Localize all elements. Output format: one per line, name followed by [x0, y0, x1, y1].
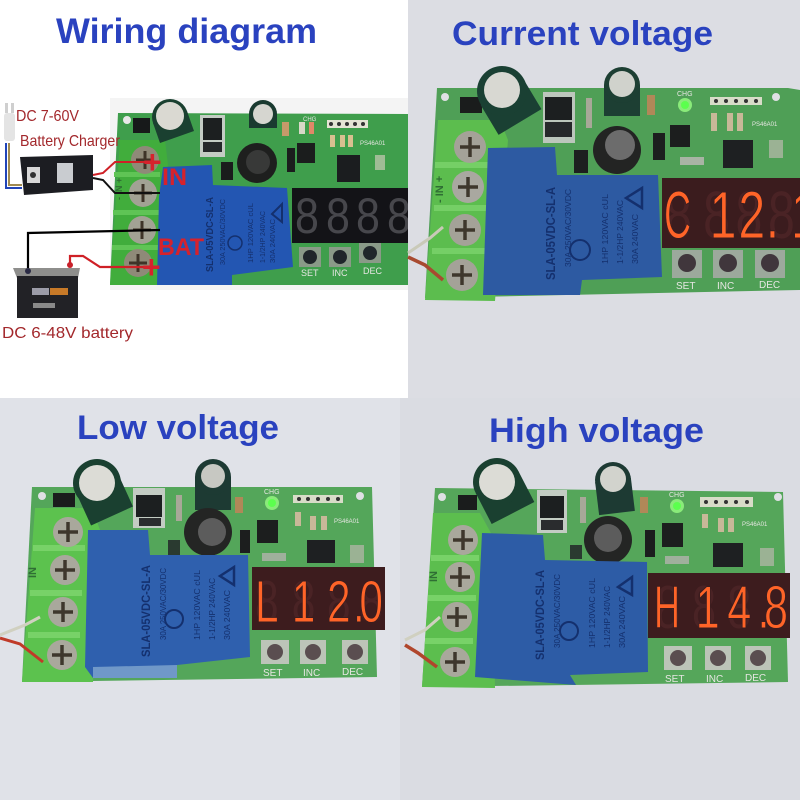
buttons: SET [301, 268, 319, 278]
LED display: C [664, 178, 691, 253]
icon: battery charger [20, 155, 93, 195]
relay: SLA-05VDC-SL-A [543, 186, 558, 280]
relay: 1HP 120VAC cUL [588, 577, 597, 648]
module board: CHG [303, 117, 317, 123]
buttons: SET [263, 668, 282, 679]
wires: charger to IN [93, 162, 160, 193]
indicator: CHG LED: CHG [677, 91, 693, 98]
label: IN: IN [162, 164, 187, 191]
wires: mains to charger [6, 143, 22, 188]
buttons: SET [665, 674, 684, 685]
relay: 30A 240VAC [223, 590, 232, 640]
LED display: 14.8 [696, 575, 788, 642]
relay [483, 147, 662, 295]
module board: PS46A01 [752, 122, 778, 128]
buttons [299, 243, 383, 278]
buttons: DEC [363, 266, 383, 276]
relay: 30A 250VAC/30VDC [564, 189, 573, 267]
relay: 30A 250VAC/30VDC [553, 574, 562, 648]
module board: - IN + [434, 176, 446, 203]
relay: SLA-05VDC-SL-A [533, 570, 547, 660]
label: battery charger: Battery Charger [20, 133, 121, 150]
buttons: INC [706, 674, 723, 685]
wires: battery to BAT [28, 230, 160, 270]
indicator: CHG LED [669, 492, 685, 513]
module board: IN [428, 571, 440, 582]
panel: high voltage [400, 398, 800, 800]
relay: SLA-05VDC-SL-A [139, 565, 153, 657]
relay: 30A 250VAC/30VDC [159, 568, 168, 640]
buttons: DEC [759, 280, 780, 291]
wires [0, 617, 43, 662]
label: charger voltage: DC 7-60V [16, 108, 79, 125]
module board [405, 458, 790, 688]
indicator: CHG LED [677, 91, 693, 112]
module board: IN [27, 567, 39, 578]
relay: 1HP 120VAC cUL [193, 569, 202, 640]
heading: low voltage: Low voltage [77, 409, 279, 447]
label: battery voltage: DC 6-48V battery [2, 325, 133, 342]
relay: 30A 240VAC [270, 219, 277, 263]
module board: PS46A01 [334, 519, 360, 525]
buttons [664, 646, 771, 685]
buttons: INC [717, 281, 734, 292]
relay: 1-1/2HP 240VAC [208, 578, 217, 640]
relay: 1-1/2HP 240VAC [260, 211, 267, 263]
module board: - IN + [114, 178, 124, 200]
panel: wiring diagram [0, 0, 411, 398]
indicator: CHG LED: CHG [264, 489, 280, 496]
relay: 30A 240VAC [618, 596, 627, 648]
label: BAT: BAT [158, 234, 204, 261]
marker: BAT plus: + [142, 249, 161, 285]
relay: 1-1/2HP 240VAC [616, 200, 625, 264]
heading: wiring diagram: Wiring diagram [56, 12, 317, 51]
heading: high voltage: High voltage [489, 412, 704, 450]
module board [0, 459, 385, 682]
buttons [261, 640, 368, 679]
relay: 30A 250VAC/30VDC [220, 199, 227, 265]
wires [408, 227, 443, 280]
LED display: 8888 [255, 568, 383, 635]
relay: 1HP 120VAC cUL [601, 193, 610, 264]
relay [475, 533, 648, 685]
indicator: CHG LED: CHG [669, 492, 685, 499]
panel: low voltage [0, 398, 400, 800]
LED display: H [654, 575, 680, 641]
LED display: 8888 [295, 188, 411, 244]
relay [85, 530, 250, 678]
buttons: DEC [342, 667, 363, 678]
relay: 1HP 120VAC cUL [248, 203, 255, 263]
icon: plug [4, 103, 15, 141]
panel: current voltage [408, 0, 800, 398]
relay [157, 165, 293, 285]
module board [110, 99, 411, 285]
buttons: INC [332, 268, 348, 278]
relay: SLA-05VDC-SL-A [205, 197, 216, 272]
wires [405, 617, 440, 667]
buttons: SET [676, 281, 695, 292]
buttons: DEC [745, 673, 766, 684]
marker: IN plus: + [143, 144, 162, 180]
icon: car battery [13, 262, 80, 318]
relay: 30A 240VAC [631, 214, 640, 264]
heading: current voltage: Current voltage [452, 15, 713, 53]
buttons: INC [303, 668, 320, 679]
buttons [672, 250, 785, 292]
indicator: CHG LED [264, 489, 280, 510]
module board: PS46A01 [360, 141, 386, 147]
module board: PS46A01 [742, 522, 768, 528]
LED display: L12.0 [255, 568, 383, 635]
LED display: 8888 [665, 178, 795, 253]
LED display: 8888 [656, 575, 788, 642]
relay: 1-1/2HP 240VAC [603, 586, 612, 648]
module board [408, 66, 800, 301]
